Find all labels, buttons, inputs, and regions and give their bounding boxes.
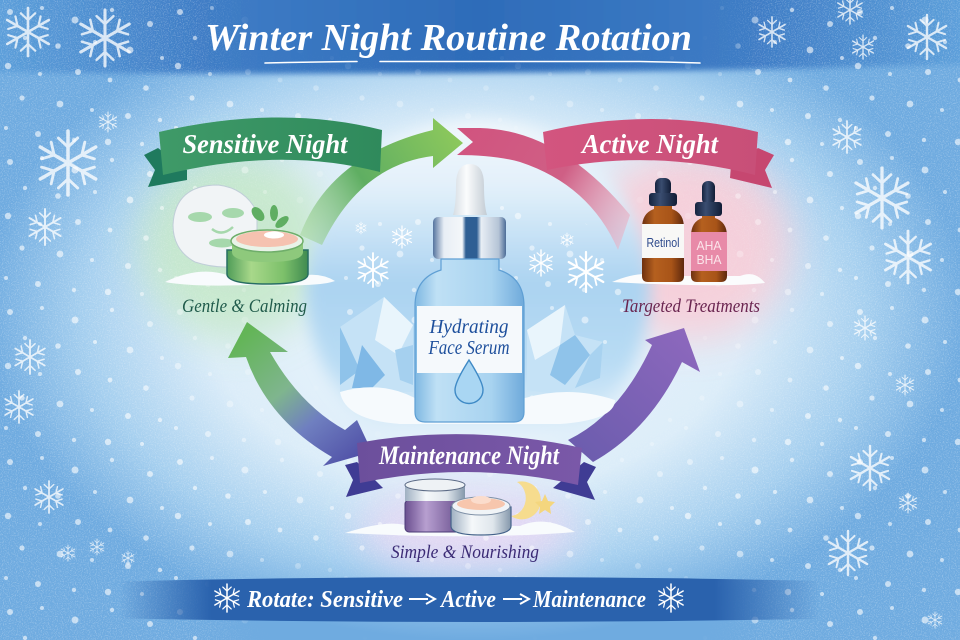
icon: green leaves	[249, 205, 291, 230]
icon: purple night jar	[405, 479, 465, 532]
snow mound under amber bottles	[612, 274, 765, 285]
arrow: purple, maintenance to active	[568, 328, 700, 462]
small snowflakes around serum	[355, 222, 606, 292]
banner text: Sensitive Night	[182, 129, 349, 159]
AHA text: AHA	[696, 239, 722, 253]
arrow: pink, active night arc	[457, 128, 630, 250]
footer snowflake left	[213, 584, 241, 612]
label text: face serum: Face Serum	[428, 337, 510, 359]
label: gentle and calming: Gentle & Calming	[182, 296, 307, 317]
header band: deep blue title sky	[0, 0, 960, 74]
label: simple and nourishing: Simple & Nourishing	[391, 542, 539, 563]
banner: sensitive night	[144, 117, 382, 187]
footer snowflake right	[657, 584, 685, 612]
AHA BHA label	[691, 232, 727, 271]
banner: maintenance night	[345, 434, 596, 500]
title underline swash	[265, 62, 700, 63]
label: targeted treatments: Targeted Treatments	[622, 296, 760, 317]
icon: star	[535, 494, 555, 514]
icon: left ice crystals	[340, 297, 413, 392]
icon: AHA BHA bottle	[691, 181, 727, 282]
icon: hydrating serum bottle	[415, 164, 524, 422]
icon: sheet mask	[173, 185, 257, 267]
metal collar	[433, 217, 506, 259]
footer text: rotate sensitive: Rotate: Sensitive	[246, 587, 403, 613]
retinol label	[642, 224, 684, 258]
arrow: green, sensitive to active	[300, 118, 463, 245]
dropper bulb	[453, 164, 487, 215]
icon: small silver cream jar	[451, 496, 511, 535]
panel glow: maintenance night	[358, 488, 578, 572]
label text: product name: Hydrating	[429, 316, 508, 338]
footer banner: rotation sequence	[100, 577, 860, 622]
icon: right ice crystals	[527, 305, 603, 395]
footer text: maintenance: Maintenance	[532, 587, 646, 613]
footer arrow two	[503, 594, 529, 604]
footer text: active: Active	[439, 587, 496, 613]
banner text: Active Night	[580, 129, 719, 159]
retinol text: Retinol	[646, 235, 680, 250]
center bubble snow dots	[328, 190, 628, 410]
snow mound under night creams	[345, 522, 575, 536]
panel glow: active night	[590, 150, 790, 340]
water drop icon	[455, 360, 483, 404]
icon: green cream jar	[227, 230, 308, 284]
banner text: Maintenance Night	[378, 441, 560, 470]
BHA text: BHA	[696, 253, 722, 267]
center bubble: frosted backdrop behind serum	[306, 120, 650, 460]
glass body	[415, 259, 524, 422]
icon: retinol bottle	[642, 178, 684, 282]
panel glow: sensitive night	[140, 150, 330, 340]
arrow: purple to green, maintenance to sensitive	[228, 322, 372, 466]
icon: crescent moon	[511, 481, 541, 519]
footer arrow one	[409, 594, 435, 604]
title: Winter Night Routine Rotation	[205, 17, 692, 59]
banner: active night	[543, 119, 774, 188]
snow ground under serum	[340, 387, 615, 424]
bottle label	[417, 306, 522, 373]
snow mound under green jar	[165, 272, 335, 286]
